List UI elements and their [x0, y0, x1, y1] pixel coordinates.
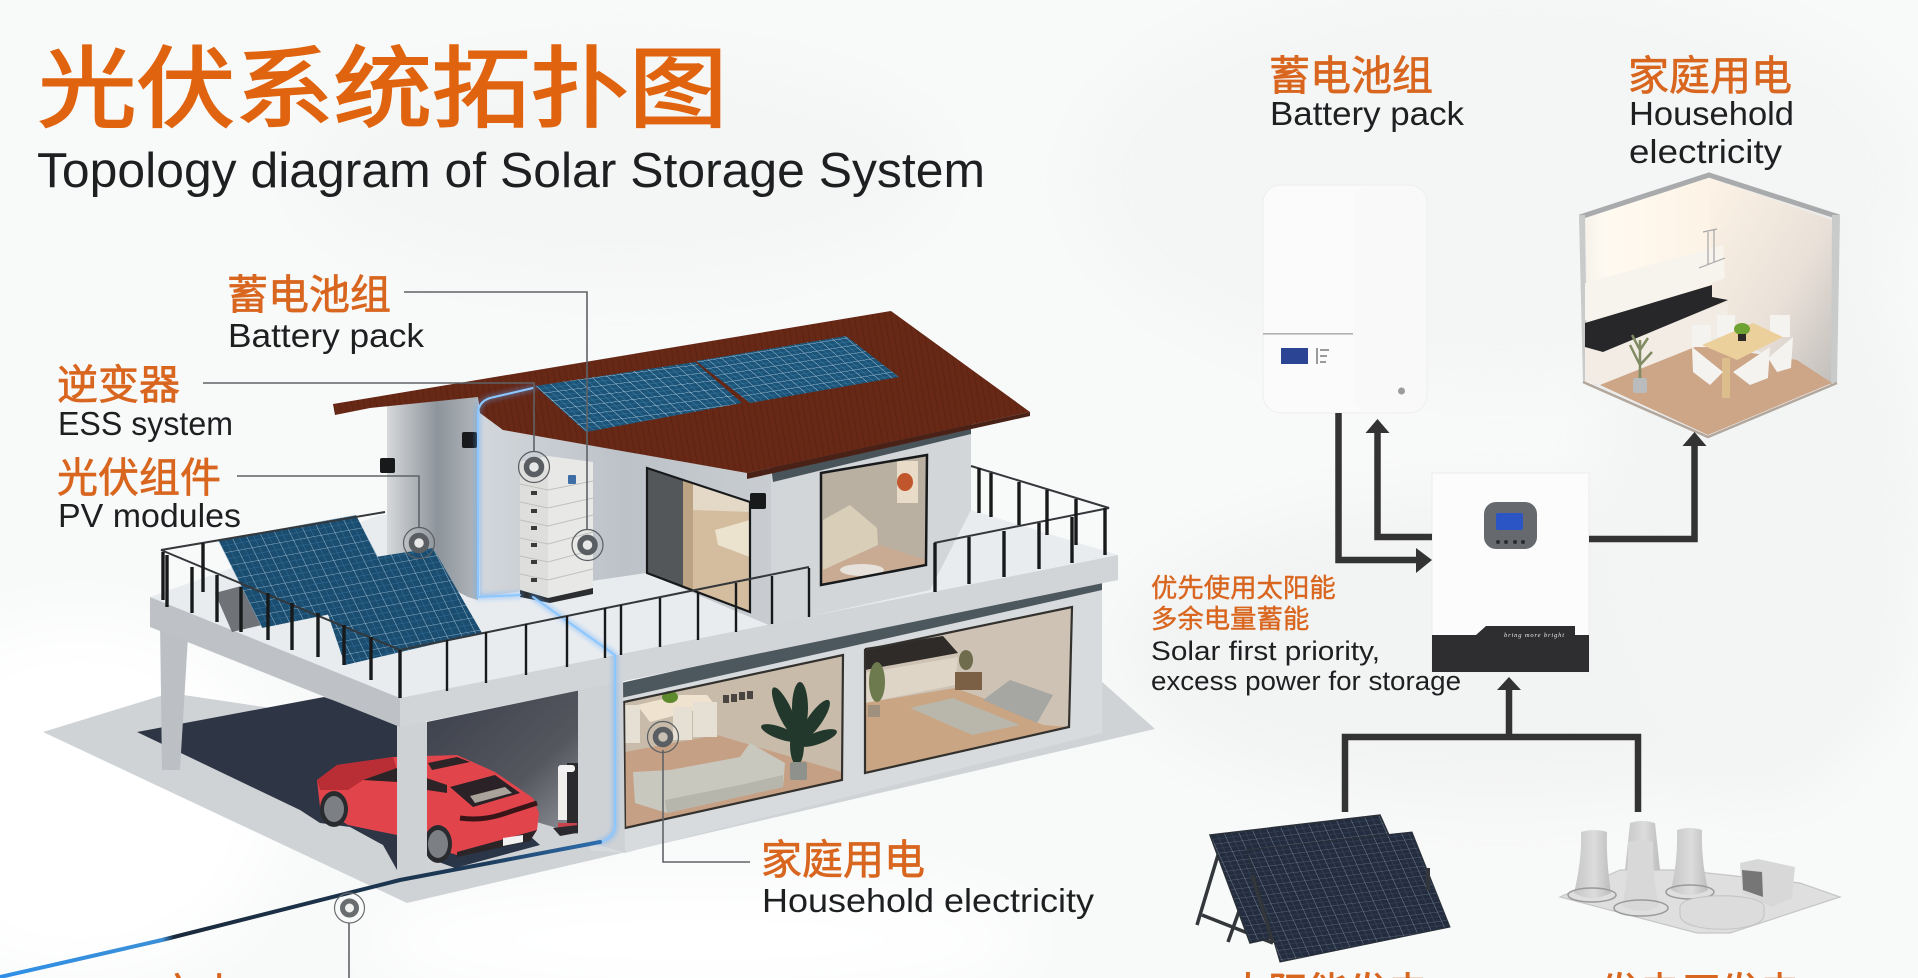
flow arrow: battery to inverter	[1338, 413, 1432, 573]
chairs back	[1692, 315, 1790, 347]
front pillar and side wall	[397, 722, 427, 880]
terrace railings	[161, 466, 1109, 698]
tower base rings	[1568, 885, 1714, 916]
black counter	[1585, 285, 1728, 352]
left ground room	[624, 655, 843, 828]
platform	[1560, 870, 1840, 933]
big plant	[759, 682, 839, 765]
label: PV modules	[57, 455, 241, 534]
car	[317, 755, 539, 863]
note: solar first priority: Solar first priority,	[1151, 636, 1380, 666]
sliding door	[647, 468, 750, 612]
leader: grid	[348, 923, 350, 978]
chairs front	[1692, 337, 1793, 385]
solar panels product	[1197, 815, 1450, 962]
left wall	[1585, 178, 1712, 385]
leader: ESS system	[203, 383, 534, 452]
flow arrow: inverter to household	[1589, 432, 1706, 539]
tower front	[1622, 840, 1659, 911]
sofa	[633, 743, 785, 813]
inverter device	[1432, 473, 1589, 672]
top edge band	[1580, 175, 1839, 217]
right wall	[1709, 178, 1832, 385]
upper cabinet	[1585, 245, 1725, 325]
leader: household electricity	[663, 750, 750, 862]
leader: battery pack	[404, 292, 587, 530]
handle	[1426, 868, 1430, 890]
label: household electricity	[761, 837, 1095, 919]
label: PV modules: PV modules	[58, 497, 241, 534]
power plant	[1560, 821, 1840, 933]
upper rear wall	[387, 392, 478, 600]
window	[821, 455, 927, 585]
dining set	[637, 695, 715, 722]
label: ESS system: ESS system	[58, 405, 233, 442]
right heading: household electricity	[1628, 53, 1794, 170]
label: household electricity: 家庭用电	[761, 837, 925, 883]
right heading: battery pack: 蓄电池组	[1269, 53, 1433, 99]
terrace slab	[150, 510, 1118, 727]
label: battery pack	[227, 272, 425, 354]
blue power wire	[0, 388, 615, 977]
tower left	[1574, 830, 1611, 898]
rear pillar	[160, 620, 189, 770]
wall lamps	[380, 432, 766, 509]
illustration: solar house	[0, 292, 1155, 978]
floor	[1600, 345, 1832, 435]
flow arrow: sources to inverter	[1345, 677, 1638, 812]
base band	[1432, 626, 1589, 672]
EV charger	[553, 763, 582, 836]
ground floor wall	[578, 583, 1102, 853]
ground solar panels on terrace	[215, 515, 482, 665]
tower right	[1671, 828, 1708, 895]
back panel	[1210, 815, 1420, 943]
front panel	[1247, 832, 1450, 962]
label: PV modules: 光伏组件	[57, 455, 221, 501]
title	[37, 40, 985, 198]
brand text: bring more bright	[1504, 632, 1564, 639]
right heading: household electricity: 家庭用电	[1628, 53, 1792, 99]
title: Topology diagram of Solar Storage System	[37, 144, 985, 198]
target: pv modules	[404, 528, 434, 558]
target: household	[648, 722, 678, 752]
target: inverter	[518, 452, 550, 482]
ground plate	[43, 680, 1155, 903]
target: grid	[334, 893, 364, 923]
household room	[1579, 173, 1840, 437]
roof solar panels	[535, 336, 899, 432]
panel legs	[1197, 855, 1273, 943]
label: battery pack: 蓄电池组	[227, 272, 391, 318]
right heading: household electricity: electricity	[1629, 133, 1783, 170]
side columns	[1579, 215, 1840, 383]
note: solar first priority: excess power for storage	[1151, 666, 1461, 696]
right heading: household electricity: Household	[1629, 95, 1794, 132]
battery pack device	[1263, 185, 1427, 413]
upper front wall	[771, 425, 971, 625]
label: household electricity: Household electricity	[762, 882, 1095, 919]
lower cabinet	[1585, 303, 1728, 385]
note: solar first priority: 优先使用太阳能	[1151, 573, 1336, 603]
note: solar first priority	[1151, 573, 1461, 696]
note: solar first priority: 多余电量蓄能	[1151, 604, 1309, 634]
upper side wall	[478, 395, 771, 626]
target: battery	[572, 530, 603, 560]
garage back wall	[427, 688, 590, 838]
storage disk	[1680, 896, 1764, 929]
roof	[333, 311, 1030, 479]
flow arrow: inverter to battery	[1366, 419, 1432, 537]
right ground room	[865, 607, 1072, 773]
floor plant	[1630, 335, 1652, 393]
right heading: battery pack: Battery pack	[1270, 95, 1465, 132]
control building	[1740, 859, 1795, 907]
garage floor shadow	[137, 697, 397, 870]
display	[1484, 502, 1537, 549]
pendant lamps	[723, 691, 753, 703]
title: 光伏系统拓扑图	[38, 40, 727, 139]
pendant	[1699, 229, 1725, 268]
table plant	[1734, 323, 1750, 341]
tower rear	[1625, 821, 1660, 870]
right heading: battery pack	[1269, 53, 1465, 132]
dining table	[1702, 323, 1783, 360]
label: ESS system	[57, 362, 233, 442]
battery stack	[520, 456, 593, 603]
label: ESS system: 逆变器	[57, 362, 180, 408]
car shadow	[428, 836, 540, 868]
leader: PV modules	[237, 476, 419, 528]
label: battery pack: Battery pack	[228, 317, 425, 354]
